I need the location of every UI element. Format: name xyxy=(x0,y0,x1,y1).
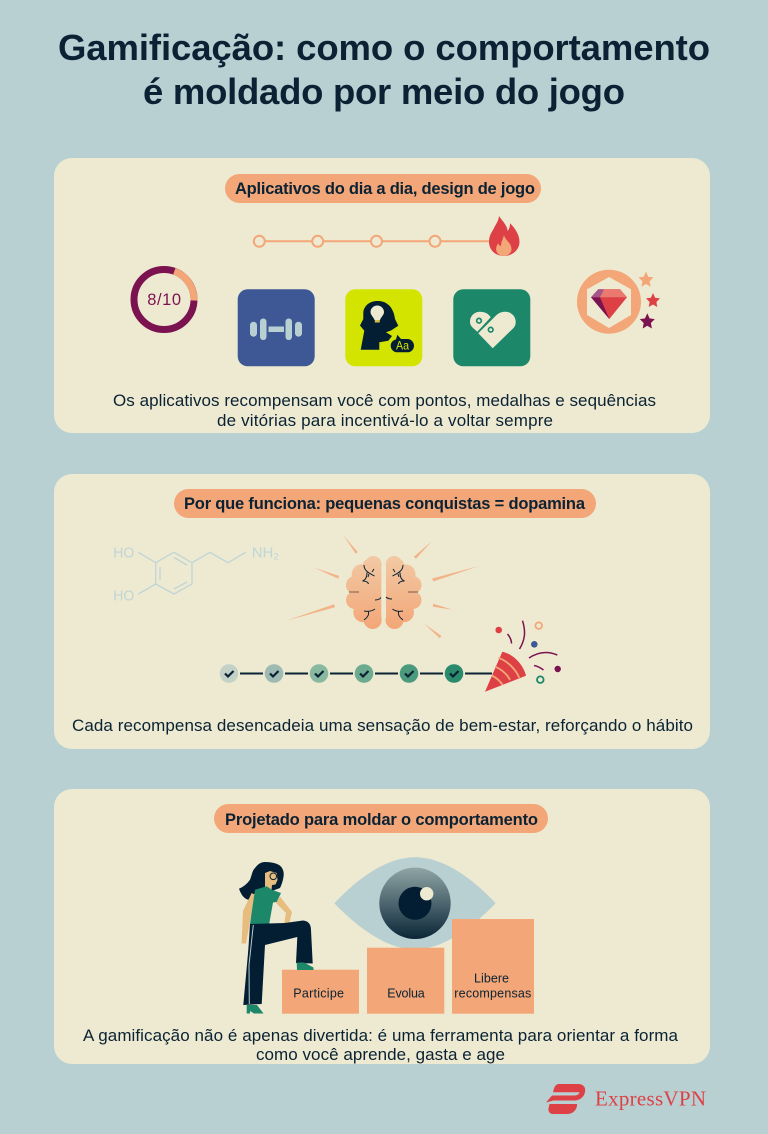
body text: dopamine: Cada recompensa desencadeia uma sensação de bem-estar, reforçando o hábito xyxy=(72,716,693,735)
panel: why it works xyxy=(54,474,710,749)
panel: designed to shape behaviour xyxy=(54,789,710,1064)
brain rays xyxy=(286,535,480,638)
title: Gamificação: como o comportamento xyxy=(58,27,710,68)
front arm xyxy=(276,896,292,927)
heading: everyday apps: Aplicativos do dia a dia, design de jogo xyxy=(235,180,535,198)
trouser stripe xyxy=(249,925,253,1004)
logo: ExpressVPN xyxy=(546,1084,706,1114)
trousers xyxy=(243,920,313,1005)
streak progress line xyxy=(254,236,495,247)
check step chain xyxy=(220,664,492,683)
dopamine molecule: NH xyxy=(252,545,273,562)
heading: everyday apps xyxy=(225,174,541,203)
step: Libere recompensas: recompensas xyxy=(454,987,531,1001)
body text: apps: Os aplicativos recompensam você com pontos, medalhas e sequências xyxy=(113,391,656,410)
shirt xyxy=(250,886,281,925)
step: Participe xyxy=(282,970,359,1014)
icon: dumbbell app xyxy=(238,289,315,366)
front shoe xyxy=(297,962,314,970)
logo: ExpressVPN: ExpressVPN xyxy=(595,1087,706,1111)
dopamine molecule: HO xyxy=(113,588,134,605)
body text: behaviour: como você aprende, gasta e age xyxy=(256,1045,505,1064)
body text: apps xyxy=(113,391,656,430)
face xyxy=(265,871,278,890)
heading: designed to shape behaviour xyxy=(214,804,548,833)
body text: behaviour: A gamificação não é apenas divertida: é uma ferramenta para orientar a forma xyxy=(83,1026,679,1045)
heading: why it works: Por que funciona: pequenas conquistas = dopamina xyxy=(184,495,586,513)
brain right hemisphere xyxy=(386,556,422,629)
figure: woman stepping up xyxy=(239,862,314,1014)
score ring 8/10 xyxy=(134,270,194,330)
glasses xyxy=(270,873,277,880)
brain folds xyxy=(349,565,418,620)
step: Participe: Participe xyxy=(293,987,344,1001)
icon: brain with rays xyxy=(286,535,480,638)
rear arm xyxy=(242,893,260,944)
step: Evolua xyxy=(367,948,444,1014)
body text: behaviour xyxy=(83,1026,679,1064)
step: Evolua: Evolua xyxy=(387,987,425,1001)
logo mark xyxy=(546,1084,585,1114)
icon: language learning app: Aa xyxy=(396,338,409,352)
step: Libere recompensas: Libere xyxy=(474,972,509,986)
icon: eye xyxy=(334,857,496,949)
panel: everyday apps xyxy=(54,158,710,433)
body text: apps: de vitórias para incentivá-lo a voltar sempre xyxy=(217,411,553,430)
title xyxy=(58,27,710,112)
heading: why it works xyxy=(174,489,596,518)
step: Libere recompensas xyxy=(452,919,534,1014)
heading: designed to shape behaviour: Projetado para moldar o comportamento xyxy=(225,811,538,829)
icon: party popper xyxy=(485,621,561,692)
title: é moldado por meio do jogo xyxy=(143,71,625,112)
brain left hemisphere xyxy=(346,556,382,629)
icon: gem badge with stars xyxy=(577,270,660,334)
dopamine molecule: 2 xyxy=(273,552,279,563)
rear shoe xyxy=(247,1005,264,1014)
dopamine molecule xyxy=(113,545,279,605)
icon: flame xyxy=(489,216,520,256)
dopamine molecule: HO xyxy=(113,545,134,562)
hair xyxy=(239,862,284,900)
icon: heart coupon app xyxy=(453,289,530,366)
icon: language learning app xyxy=(345,289,422,366)
score ring 8/10: 8/10 xyxy=(147,291,181,309)
